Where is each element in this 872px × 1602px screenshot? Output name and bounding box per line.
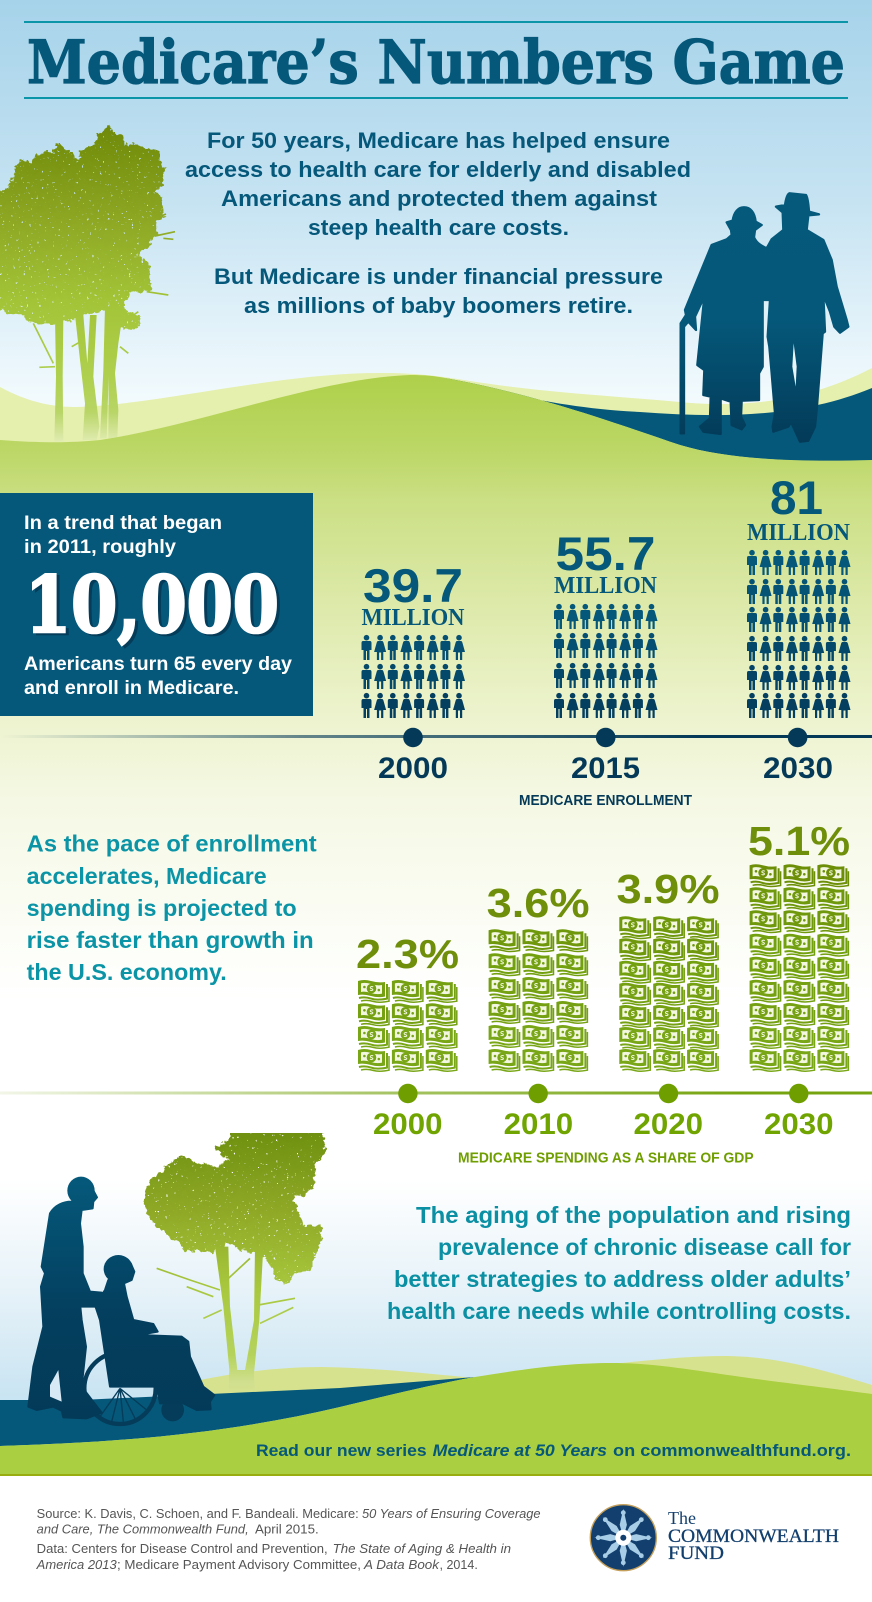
text block: aging population: The aging of the population and rising — [416, 1202, 851, 1228]
background lower sky — [0, 1000, 872, 1480]
background sky — [0, 0, 872, 470]
panel: 10,000 callout — [0, 493, 313, 716]
text block: introduction — [185, 128, 691, 318]
chart: spending 2010: 3.6% — [487, 880, 590, 926]
timeline: spending: 2020 — [634, 1108, 703, 1141]
icon: tree top left — [0, 127, 175, 442]
text block: sources — [36, 1507, 541, 1572]
icon: tree bottom — [145, 1127, 325, 1393]
text block: sources: and Care, The Commonwealth Fund, — [37, 1523, 249, 1537]
chart: spending 2030 — [748, 818, 850, 1071]
panel: 10,000 callout: in 2011, roughly — [24, 537, 176, 558]
road: dark path bottom — [0, 1377, 475, 1446]
chart: enrollment 2000: 39.7 — [363, 559, 463, 612]
text block: introduction: steep health care costs. — [308, 215, 569, 240]
timeline: enrollment: MEDICARE ENROLLMENT — [519, 792, 692, 809]
text block: introduction: as millions of baby boomers retire. — [244, 293, 633, 318]
text block: sources: 50 Years of Ensuring Coverage — [362, 1507, 541, 1521]
text block: introduction: access to health care for elderly and disabled — [185, 157, 691, 182]
text block: sources: ; Medicare Payment Advisory Committee, — [117, 1558, 361, 1572]
green hill and lower background — [0, 375, 872, 1000]
chart: enrollment 2000 — [362, 559, 465, 718]
chart: enrollment 2030: 81 — [770, 471, 823, 524]
text block: introduction: But Medicare is under financial pressure — [214, 264, 663, 289]
text block: spending pace: the U.S. economy. — [27, 959, 227, 985]
panel: 10,000 callout: Americans turn 65 every day — [24, 654, 292, 675]
panel: 10,000 callout: In a trend that began — [24, 513, 222, 534]
text block: spending pace: spending is projected to — [27, 895, 297, 921]
text block: spending pace — [27, 831, 317, 985]
chart: spending 2000 — [356, 931, 459, 1071]
chart: enrollment 2030 — [747, 471, 851, 718]
pale hill top — [0, 368, 872, 470]
text block: sources: Source: K. Davis, C. Schoen, and F. Bandeali. Medicare: — [37, 1507, 359, 1521]
road: dark path top — [445, 378, 872, 462]
chart: spending 2010 — [487, 880, 590, 1071]
text block: aging population: health care needs while controlling costs. — [387, 1298, 851, 1324]
text block: sources: Data: Centers for Disease Control and Prevention, — [37, 1542, 328, 1556]
text block: introduction: For 50 years, Medicare has helped ensure — [207, 128, 670, 153]
panel: 10,000 callout: and enroll in Medicare. — [24, 678, 239, 699]
text block: sources: The State of Aging & Health in — [333, 1542, 511, 1556]
timeline: spending: 2030 — [764, 1108, 834, 1141]
text block: sources: A Data Book — [363, 1558, 440, 1572]
timeline: enrollment: 2030 — [763, 752, 833, 785]
green base strip — [0, 1474, 872, 1476]
link: read our new series: Medicare at 50 Years — [433, 1441, 607, 1460]
timeline: enrollment: 2000 — [378, 752, 448, 785]
chart: spending 2020 — [616, 866, 720, 1071]
icon: elderly couple silhouette — [681, 193, 848, 442]
chart: enrollment 2015 — [554, 527, 658, 718]
text block: spending pace: accelerates, Medicare — [27, 863, 267, 889]
logo: The Commonwealth Fund: The — [668, 1508, 696, 1528]
green hill bottom — [0, 1363, 872, 1474]
text block: sources: America 2013 — [36, 1558, 117, 1572]
chart: enrollment 2015: MILLION — [554, 573, 658, 599]
timeline: enrollment — [0, 728, 872, 809]
chart: enrollment 2030: MILLION — [747, 520, 851, 546]
text block: spending pace: rise faster than growth in — [27, 927, 314, 953]
link: read our new series: on commonwealthfund.org. — [613, 1441, 851, 1460]
link: read our new series: Read our new series — [256, 1441, 427, 1460]
timeline: spending: 2010 — [504, 1108, 573, 1141]
chart: enrollment 2015: 55.7 — [556, 527, 656, 580]
logo: The Commonwealth Fund: COMMONWEALTH — [668, 1526, 839, 1547]
text block: aging population: prevalence of chronic disease call for — [438, 1234, 851, 1260]
timeline: spending: MEDICARE SPENDING AS A SHARE OF GDP — [458, 1150, 754, 1167]
text block: introduction: Americans and protected them against — [221, 186, 658, 211]
logo: The Commonwealth Fund: FUND — [668, 1543, 724, 1564]
chart: spending 2020: 3.9% — [616, 866, 720, 912]
timeline: enrollment: 2015 — [571, 752, 640, 785]
icon: man pushing wheelchair silhouette — [28, 1177, 214, 1424]
icon: logo emblem — [590, 1505, 656, 1571]
footer background — [0, 1476, 872, 1602]
timeline: spending — [0, 1084, 872, 1167]
chart: spending 2000: 2.3% — [356, 931, 459, 977]
text block: aging population — [387, 1202, 851, 1324]
chart: enrollment 2000: MILLION — [362, 605, 465, 631]
text block: sources: April 2015. — [255, 1523, 319, 1537]
pale hill bottom — [200, 1356, 872, 1400]
text block: sources: , 2014. — [440, 1558, 478, 1572]
text block: spending pace: As the pace of enrollment — [27, 831, 317, 857]
panel: 10,000 callout: 10,000 — [25, 560, 279, 651]
timeline: spending: 2000 — [373, 1108, 442, 1141]
logo: The Commonwealth Fund — [590, 1505, 839, 1571]
chart: spending 2030: 5.1% — [748, 818, 850, 864]
text block: aging population: better strategies to address older adults’ — [394, 1266, 851, 1292]
